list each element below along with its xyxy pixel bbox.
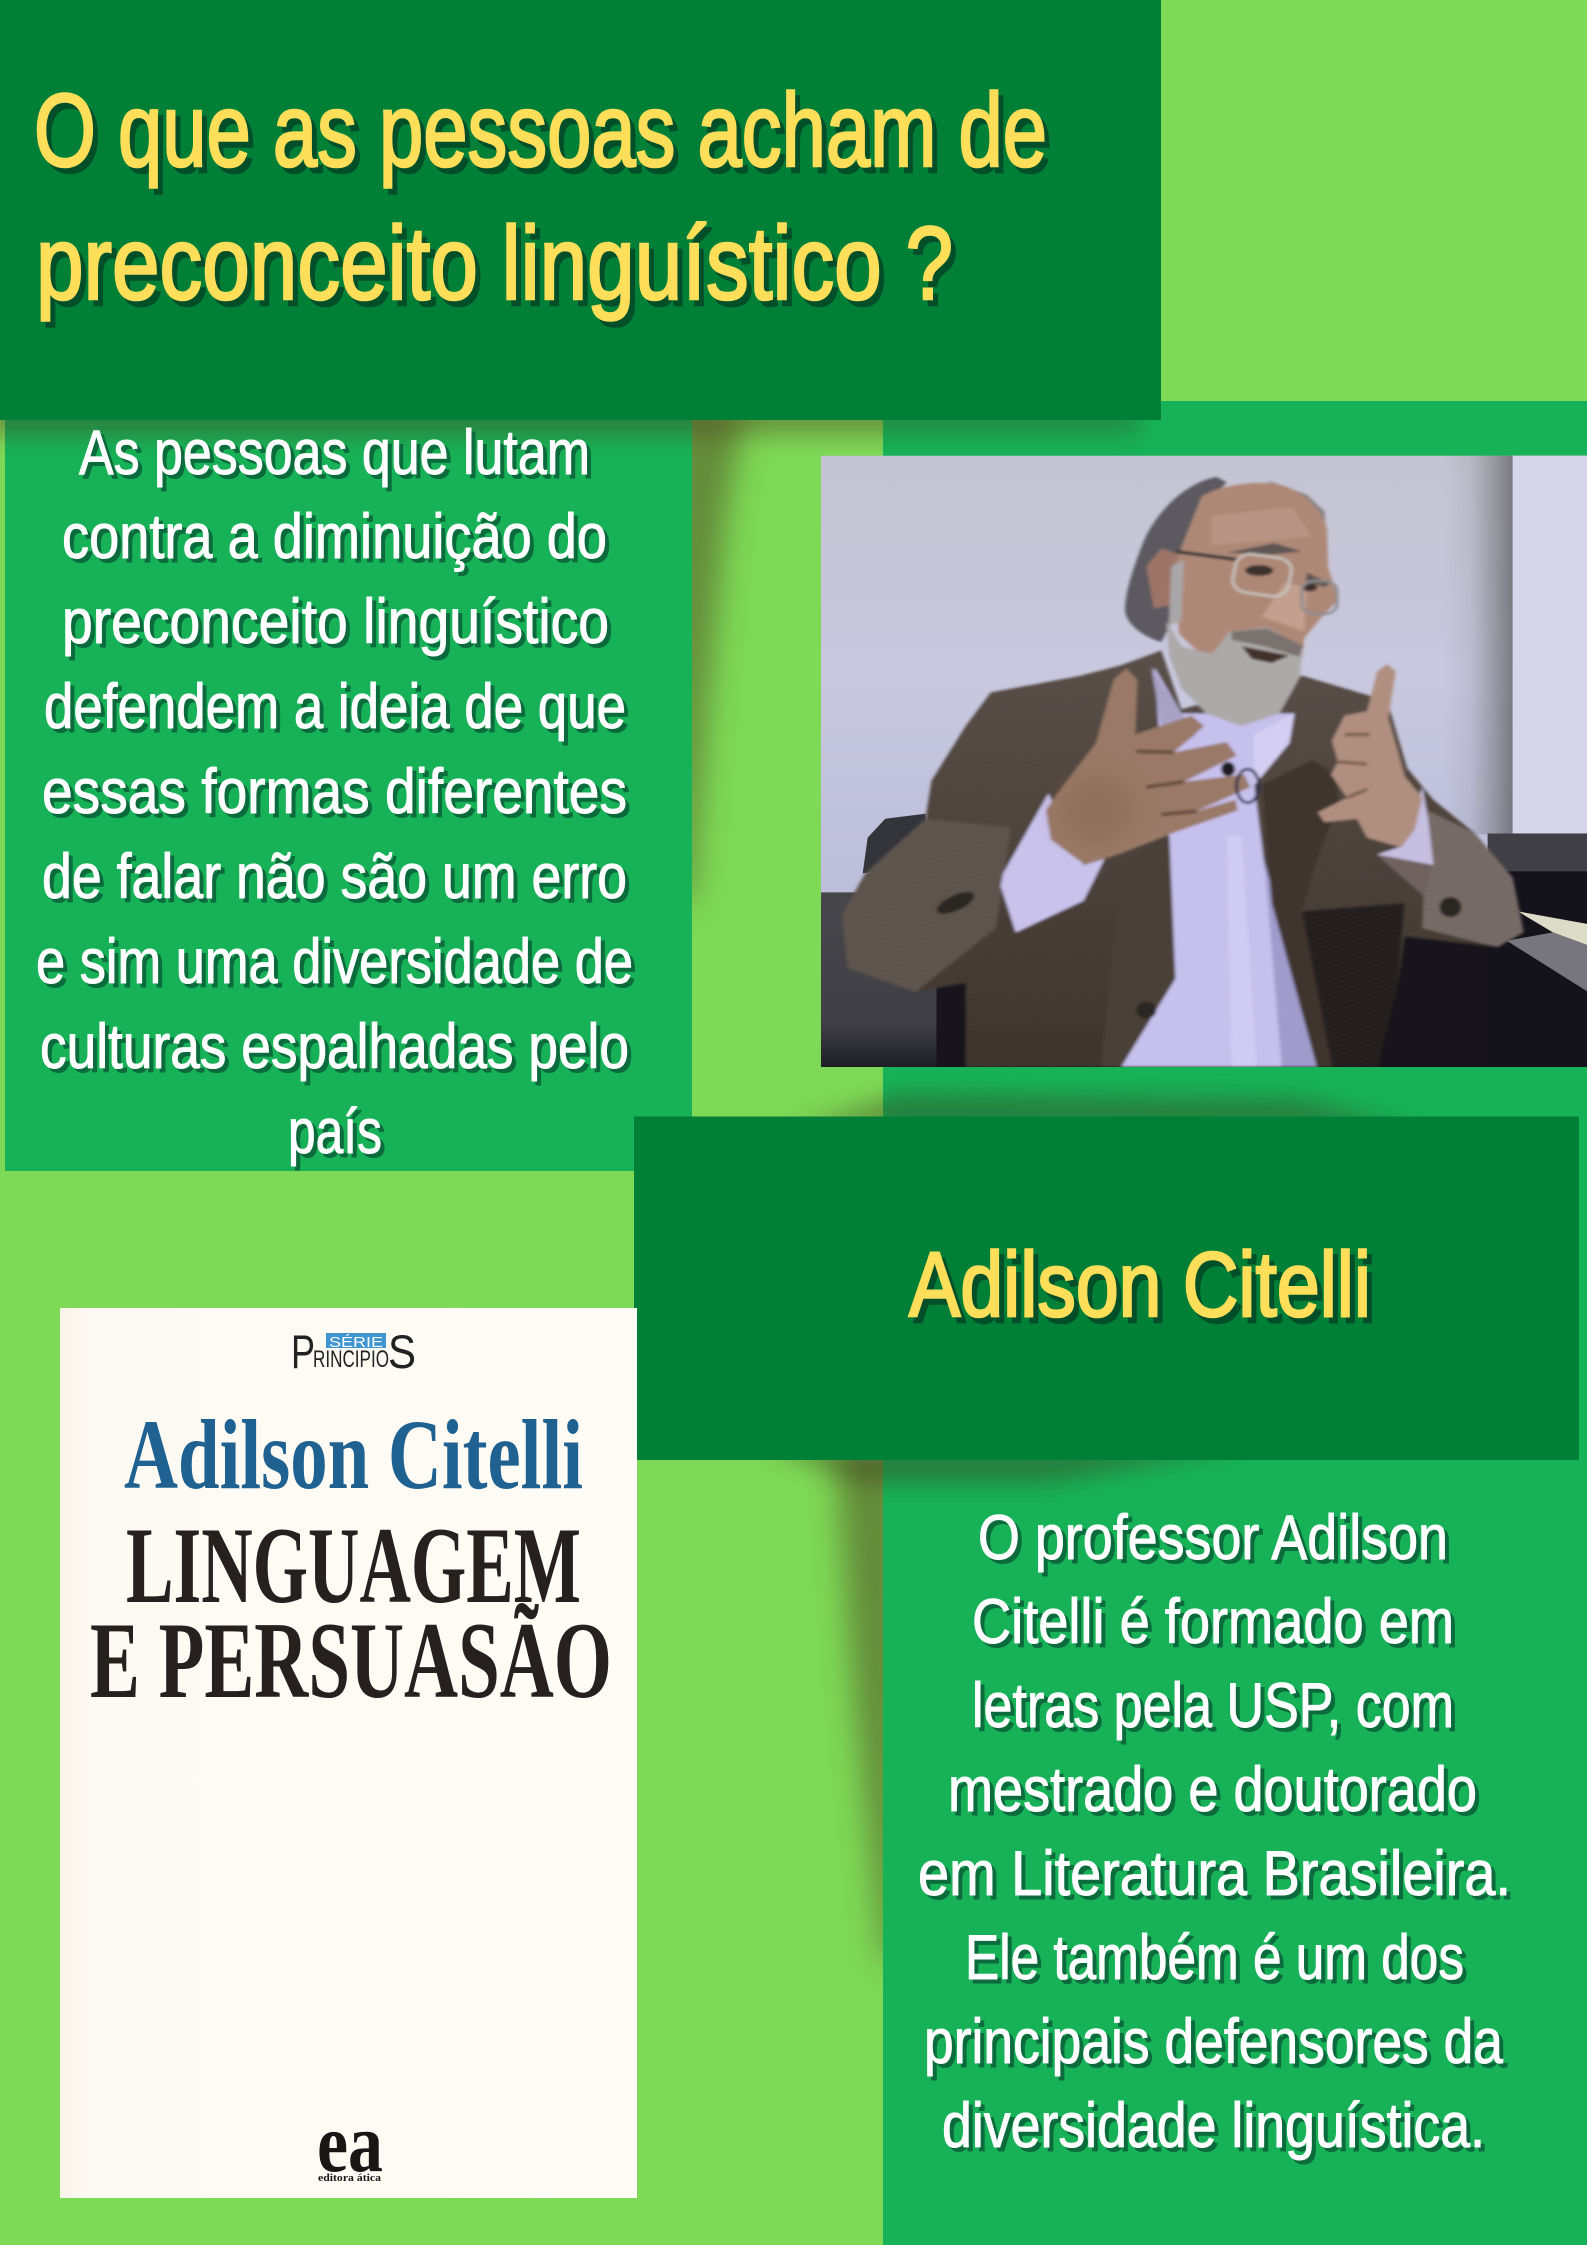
book title: E PERSUASÃO (90, 1600, 612, 1721)
text block: right paragraph: mestrado e doutorado (948, 1755, 1477, 1825)
text block: right paragraph (918, 1503, 1511, 2161)
text block: right paragraph: principais defensores da (924, 2007, 1504, 2077)
heading: title: O que as pessoas acham de (34, 73, 1047, 189)
publisher logo: editora ática (318, 2172, 382, 2184)
text block: left paragraph: As pessoas que lutam (79, 418, 590, 488)
book series logo: P (291, 1325, 315, 1378)
text block: left paragraph: essas formas diferentes (42, 757, 627, 827)
text block: left paragraph: culturas espalhadas pelo (40, 1012, 629, 1082)
face (1174, 483, 1338, 659)
text block: left paragraph: país (288, 1097, 382, 1167)
book series logo: SÉRIE (329, 1334, 383, 1351)
lapels (1101, 760, 1340, 1067)
book title: LINGUAGEM (126, 1505, 581, 1626)
shirt (1121, 667, 1327, 1067)
panel: right column (883, 401, 1587, 2245)
coat buttons (933, 887, 1462, 1019)
beard (1166, 621, 1303, 726)
microphone (1221, 762, 1259, 803)
text block: right paragraph: diversidade linguística. (942, 2091, 1485, 2161)
panel: left text background (5, 420, 692, 1171)
text block: left paragraph: preconceito linguístico (62, 587, 609, 657)
heading: Adilson Citelli: Adilson Citelli (909, 1234, 1371, 1336)
publisher logo: ea (317, 2097, 383, 2190)
panel: name banner (634, 1116, 1579, 1460)
text block: left paragraph: defendem a ideia de que (44, 672, 626, 742)
photo: Adilson Citelli (821, 456, 1587, 1067)
chair (821, 814, 936, 1067)
left hand (1046, 669, 1250, 865)
ear (1146, 549, 1177, 608)
lower dark background (936, 935, 1488, 1067)
text block: right paragraph: O professor Adilson (978, 1503, 1448, 1573)
book author: Adilson Citelli (124, 1399, 583, 1510)
person (840, 477, 1528, 1067)
eyebrows and eyes (1227, 543, 1329, 592)
text block: right paragraph: Ele também é um dos (965, 1923, 1464, 1993)
text block: right paragraph: em Literatura Brasileira. (918, 1839, 1511, 1909)
book series logo: S (388, 1325, 416, 1378)
book series logo (291, 1325, 416, 1378)
text block: left paragraph: de falar não são um erro (42, 842, 627, 912)
heading: title (34, 73, 1047, 322)
book cover (60, 1308, 637, 2198)
text block: right paragraph: letras pela USP, com (972, 1671, 1454, 1741)
book series logo: RINCIPIO (313, 1346, 389, 1373)
text block: right paragraph: Citelli é formado em (972, 1587, 1454, 1657)
jacket (840, 646, 1528, 1067)
text block: left paragraph: contra a diminuição do (62, 502, 607, 572)
right hand (1318, 664, 1422, 847)
text block: left paragraph (36, 418, 633, 1167)
heading: title: preconceito linguístico ? (36, 206, 953, 322)
wall (821, 456, 1587, 902)
hair (1125, 477, 1227, 642)
panel: title (0, 0, 1161, 420)
shadows (0, 400, 1420, 1960)
desk (1488, 833, 1587, 992)
book title (90, 1505, 612, 1721)
glasses (1176, 552, 1337, 614)
text block: left paragraph: e sim uma diversidade de (36, 927, 633, 997)
sleeve cuffs (1001, 787, 1433, 932)
